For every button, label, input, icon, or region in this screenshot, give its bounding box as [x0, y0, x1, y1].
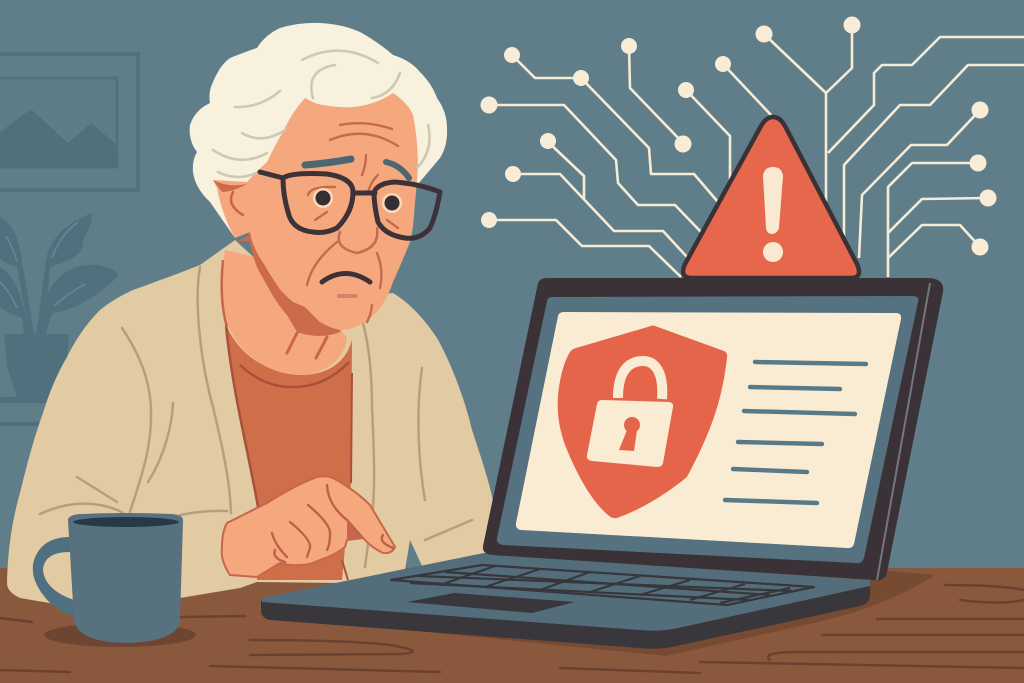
laptop screen	[483, 278, 943, 580]
head group	[190, 23, 447, 330]
eyes	[313, 188, 333, 208]
potted plant	[0, 213, 119, 426]
table	[0, 568, 1024, 683]
shirt	[227, 327, 352, 580]
face wrinkles	[307, 123, 398, 322]
neck	[222, 232, 347, 375]
cardigan / body	[7, 240, 495, 607]
circuit nodes	[480, 16, 996, 256]
circuit lines	[489, 25, 1024, 277]
pointing hand	[222, 476, 395, 577]
face	[213, 93, 418, 330]
trackpad	[407, 593, 575, 613]
hair strands	[213, 51, 430, 177]
laptop shadow	[267, 570, 935, 656]
hair	[190, 23, 447, 238]
keyboard	[391, 565, 814, 605]
shirt left edge	[226, 325, 258, 507]
warning triangle	[683, 117, 859, 278]
glasses	[260, 172, 440, 238]
ear details	[213, 180, 247, 192]
shield with padlock	[558, 326, 727, 518]
eyebrows	[305, 159, 351, 165]
mug	[33, 513, 183, 643]
text lines on screen	[725, 362, 866, 503]
mouth	[322, 274, 370, 282]
shirt collar	[240, 362, 349, 387]
cardigan folds	[40, 267, 472, 567]
picture frame	[0, 54, 138, 190]
laptop base	[261, 553, 870, 649]
mug shadow	[44, 623, 196, 647]
